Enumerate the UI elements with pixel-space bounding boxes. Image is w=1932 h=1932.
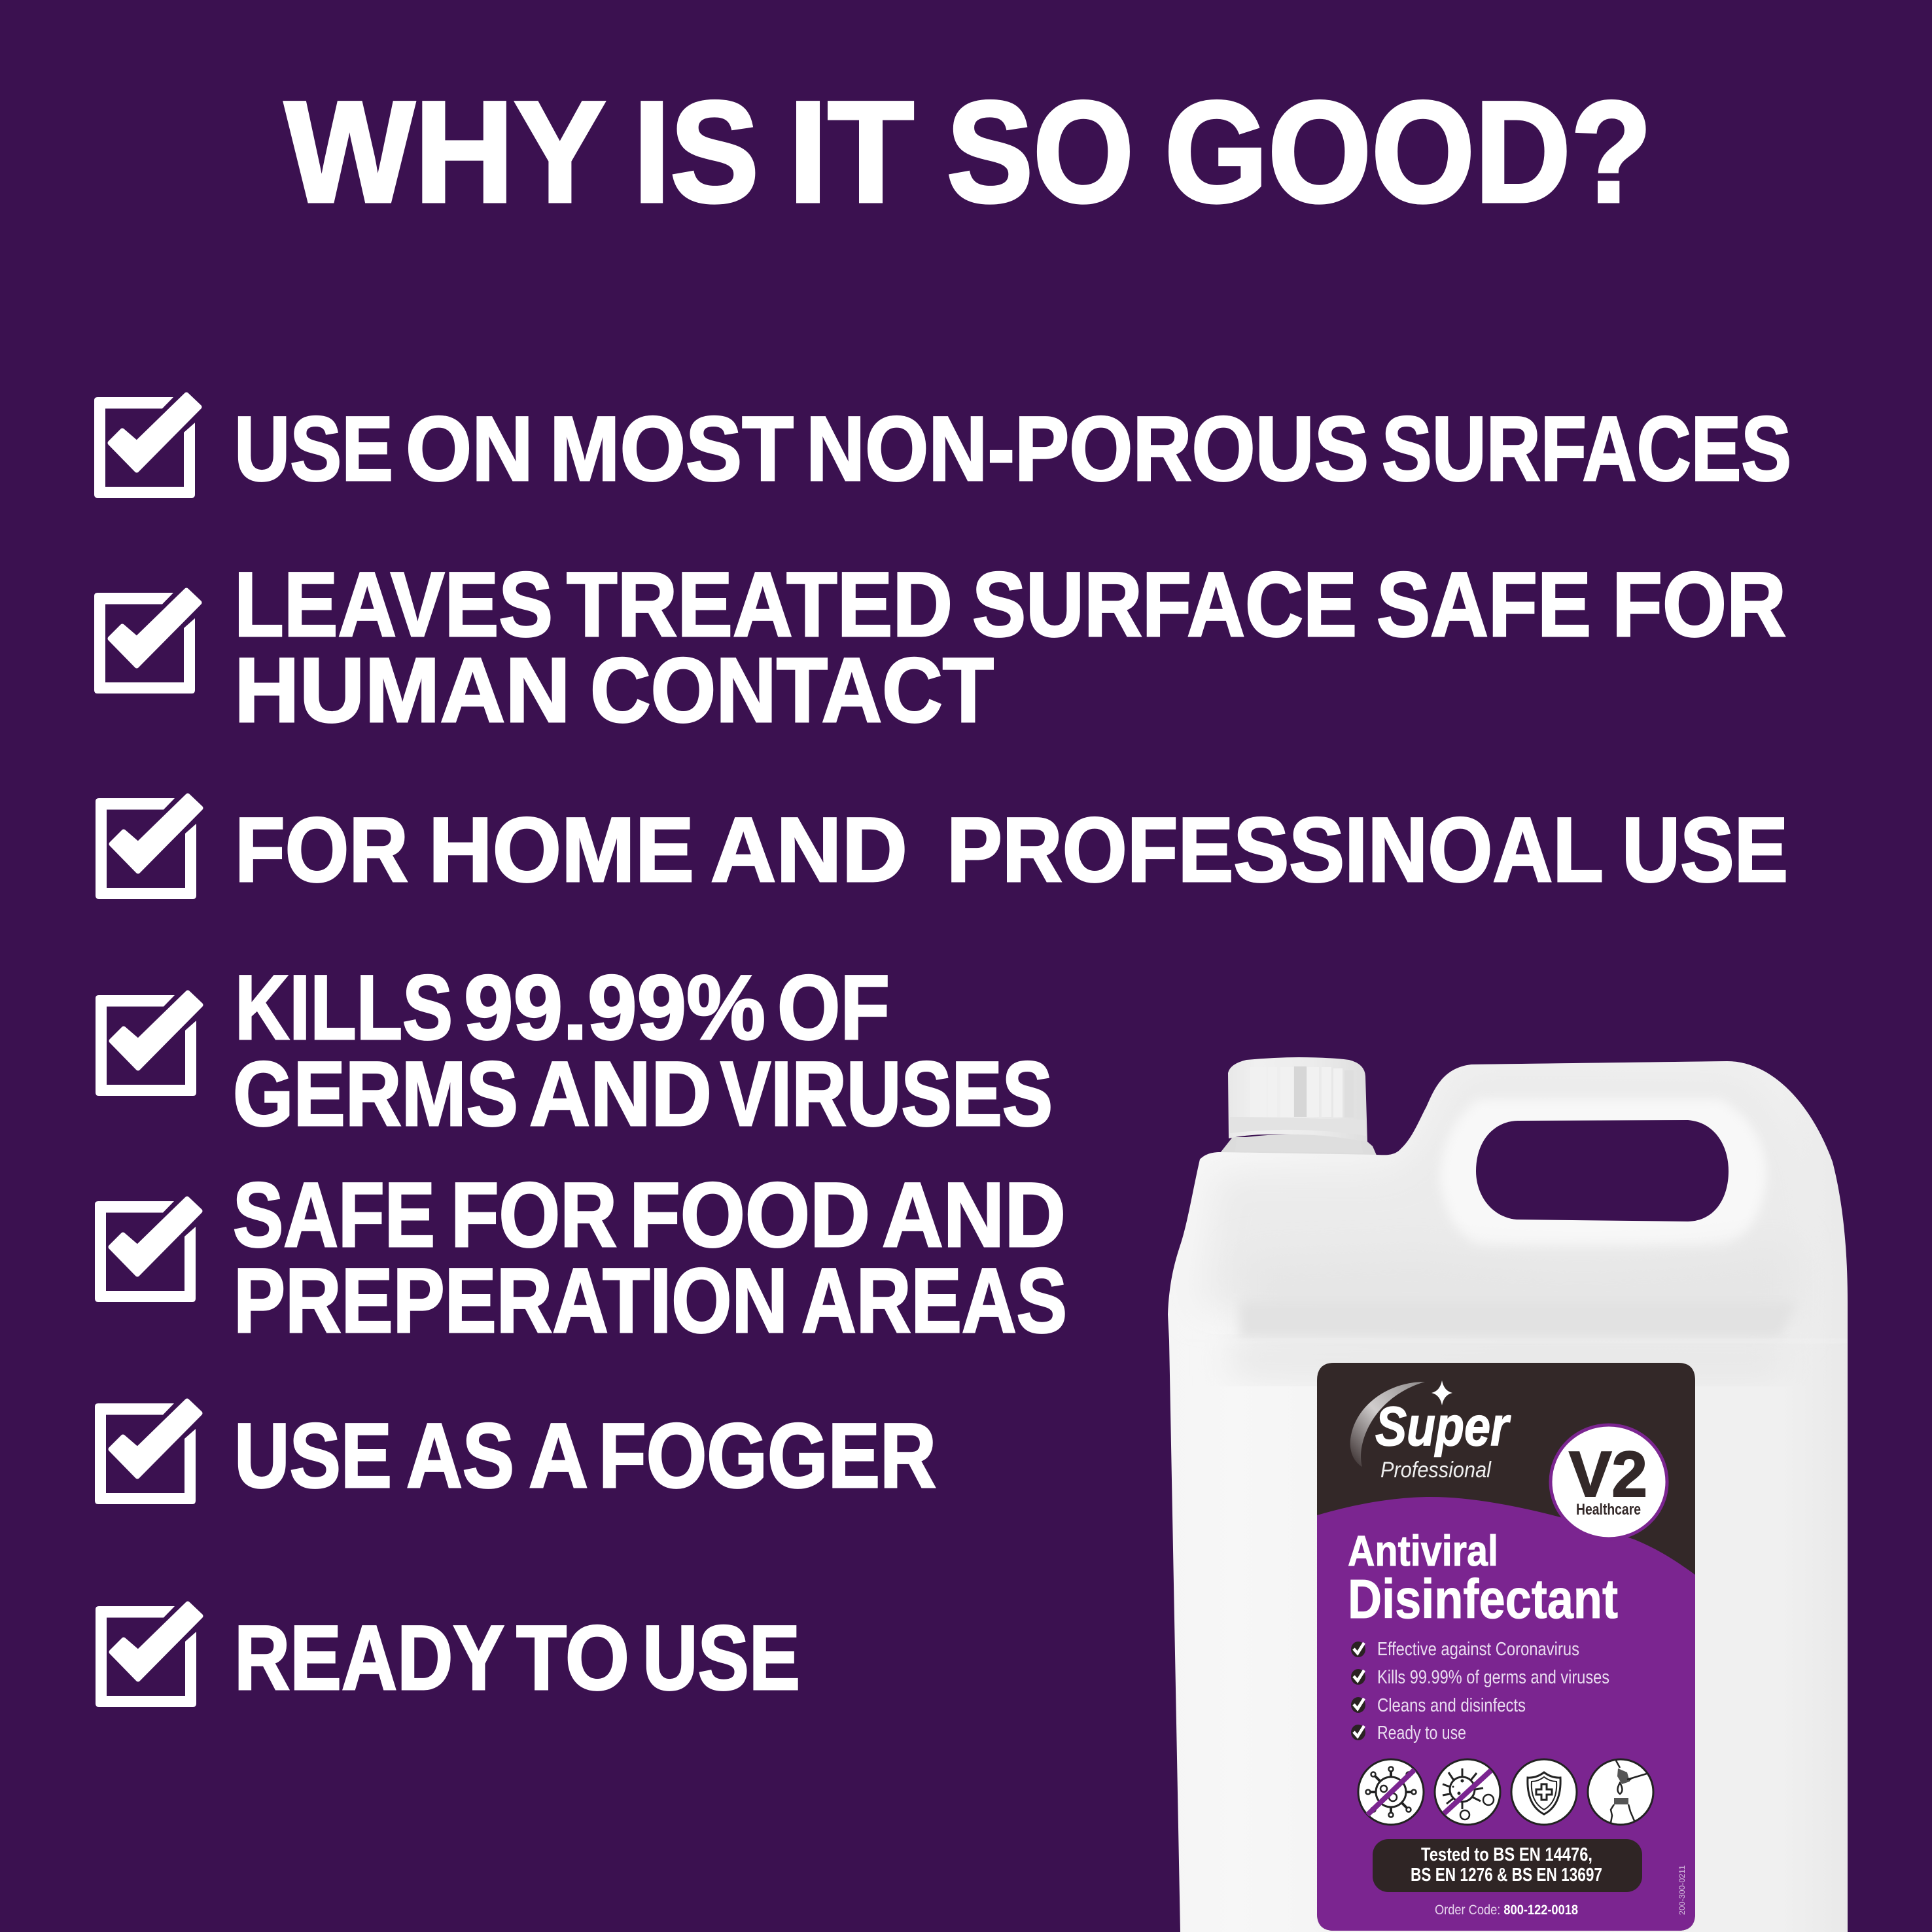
item 6: text	[234, 1404, 936, 1507]
soft shading	[1212, 1061, 1755, 1295]
logo: crescent	[1350, 1382, 1425, 1467]
vertical print code: 200-300-0211	[1677, 1865, 1687, 1915]
logo: Professional: Professional	[1380, 1458, 1492, 1483]
checklist	[94, 395, 1791, 1709]
icon: germs crossed out	[1435, 1759, 1500, 1825]
order code: Order Code: 800-122-0018	[1435, 1903, 1578, 1918]
product bottle	[1168, 1057, 1852, 1932]
item 6: checkbox icon	[95, 1401, 200, 1504]
item 7: checkbox icon	[96, 1604, 201, 1707]
item 3: checkbox icon	[96, 796, 201, 899]
label checklist: Effective against Coronavirus	[1377, 1639, 1579, 1660]
item 2: checkbox icon	[94, 590, 200, 694]
title	[285, 71, 1652, 232]
title: GOOD?	[1165, 71, 1652, 232]
item 6: text: A	[529, 1404, 588, 1507]
item 1: text: MOST	[550, 397, 794, 500]
item 4: text: KILLS	[235, 956, 453, 1059]
item 5: text: SAFE	[233, 1163, 435, 1266]
bottle cap	[1228, 1057, 1367, 1153]
item 5: text: AND	[882, 1163, 1066, 1266]
bottle neck	[1220, 1137, 1377, 1157]
item 4: text: VIRUSES	[720, 1042, 1053, 1145]
item 1: text: NON-POROUS	[806, 397, 1369, 500]
icon: medical shield	[1511, 1759, 1577, 1825]
label checklist: Ready to use	[1377, 1723, 1466, 1744]
purple wave panel	[1317, 1497, 1695, 1931]
item 1: text: SURFACES	[1382, 397, 1791, 500]
item 7: text: READY	[234, 1606, 504, 1709]
product name: Antiviral	[1348, 1526, 1498, 1575]
item 7: text	[234, 1606, 800, 1709]
logo: Super: Super	[1375, 1396, 1511, 1457]
item 2: text	[234, 553, 1786, 741]
item 2: text: SURFACE	[972, 553, 1357, 656]
item 1: text: ON	[406, 397, 533, 500]
item 7: text: TO	[516, 1606, 629, 1709]
label check marks	[1351, 1642, 1365, 1740]
product name	[1348, 1526, 1618, 1630]
item 4: text: GERMS	[233, 1042, 518, 1145]
label checklist: Kills 99.99% of germs and viruses	[1377, 1667, 1609, 1688]
item 3: text: HOME	[429, 798, 694, 901]
item 5: text: PREPERATION	[234, 1249, 788, 1352]
product label	[1317, 1363, 1695, 1931]
item 1: checkbox icon	[94, 395, 200, 498]
item 1: text: USE	[234, 397, 393, 500]
standards box: BS EN 1276 & BS EN 13697	[1411, 1865, 1602, 1886]
item 6: text: AS	[406, 1404, 514, 1507]
item 4: text: 99.99%	[464, 956, 765, 1059]
item 2: text: TREATED	[567, 553, 953, 656]
item 2: text: SAFE	[1377, 553, 1591, 656]
item 3: text: AND	[711, 798, 907, 901]
item 2: text: FOR	[1612, 553, 1786, 656]
product name: Disinfectant	[1348, 1568, 1618, 1630]
item 5: text: FOOD	[629, 1163, 870, 1266]
label checklist: Cleans and disinfects	[1377, 1695, 1526, 1716]
icon: pouring bottle	[1588, 1759, 1653, 1825]
V2 badge	[1551, 1425, 1667, 1539]
V2 badge: Healthcare	[1576, 1501, 1641, 1519]
item 2: text: HUMAN	[234, 639, 571, 741]
item 5: text	[233, 1163, 1067, 1352]
handle opening	[1476, 1120, 1729, 1221]
bottle body	[1168, 1061, 1852, 1932]
item 6: text: FOGGER	[599, 1404, 936, 1507]
title: WHY	[285, 71, 606, 232]
item 4: text	[233, 956, 1053, 1145]
item 3: text: FOR	[235, 798, 408, 901]
title: IS	[633, 71, 759, 232]
title: IT	[788, 71, 914, 232]
item 5: text: AREAS	[801, 1249, 1067, 1352]
item 6: text: USE	[234, 1404, 392, 1507]
V2 badge: V2	[1569, 1438, 1647, 1510]
item 3: text	[235, 798, 1788, 901]
item 4: text: AND	[529, 1042, 712, 1145]
item 1: text	[234, 397, 1791, 500]
item 2: text: CONTACT	[590, 639, 994, 741]
item 2: text: LEAVES	[234, 553, 553, 656]
item 7: text: USE	[642, 1606, 800, 1709]
item 3: text: USE	[1622, 798, 1788, 901]
logo: star	[1431, 1380, 1452, 1405]
item 5: text: FOR	[451, 1163, 617, 1266]
item 4: text: OF	[777, 956, 890, 1059]
label checklist	[1351, 1639, 1609, 1744]
standards box: Tested to BS EN 14476,	[1421, 1844, 1592, 1865]
item 3: text: PROFESSINOAL	[947, 798, 1604, 901]
icon: coronavirus crossed out	[1358, 1759, 1424, 1825]
title: SO	[947, 71, 1134, 232]
standards box	[1373, 1839, 1642, 1892]
item 5: checkbox icon	[95, 1199, 200, 1302]
item 4: checkbox icon	[96, 992, 201, 1096]
